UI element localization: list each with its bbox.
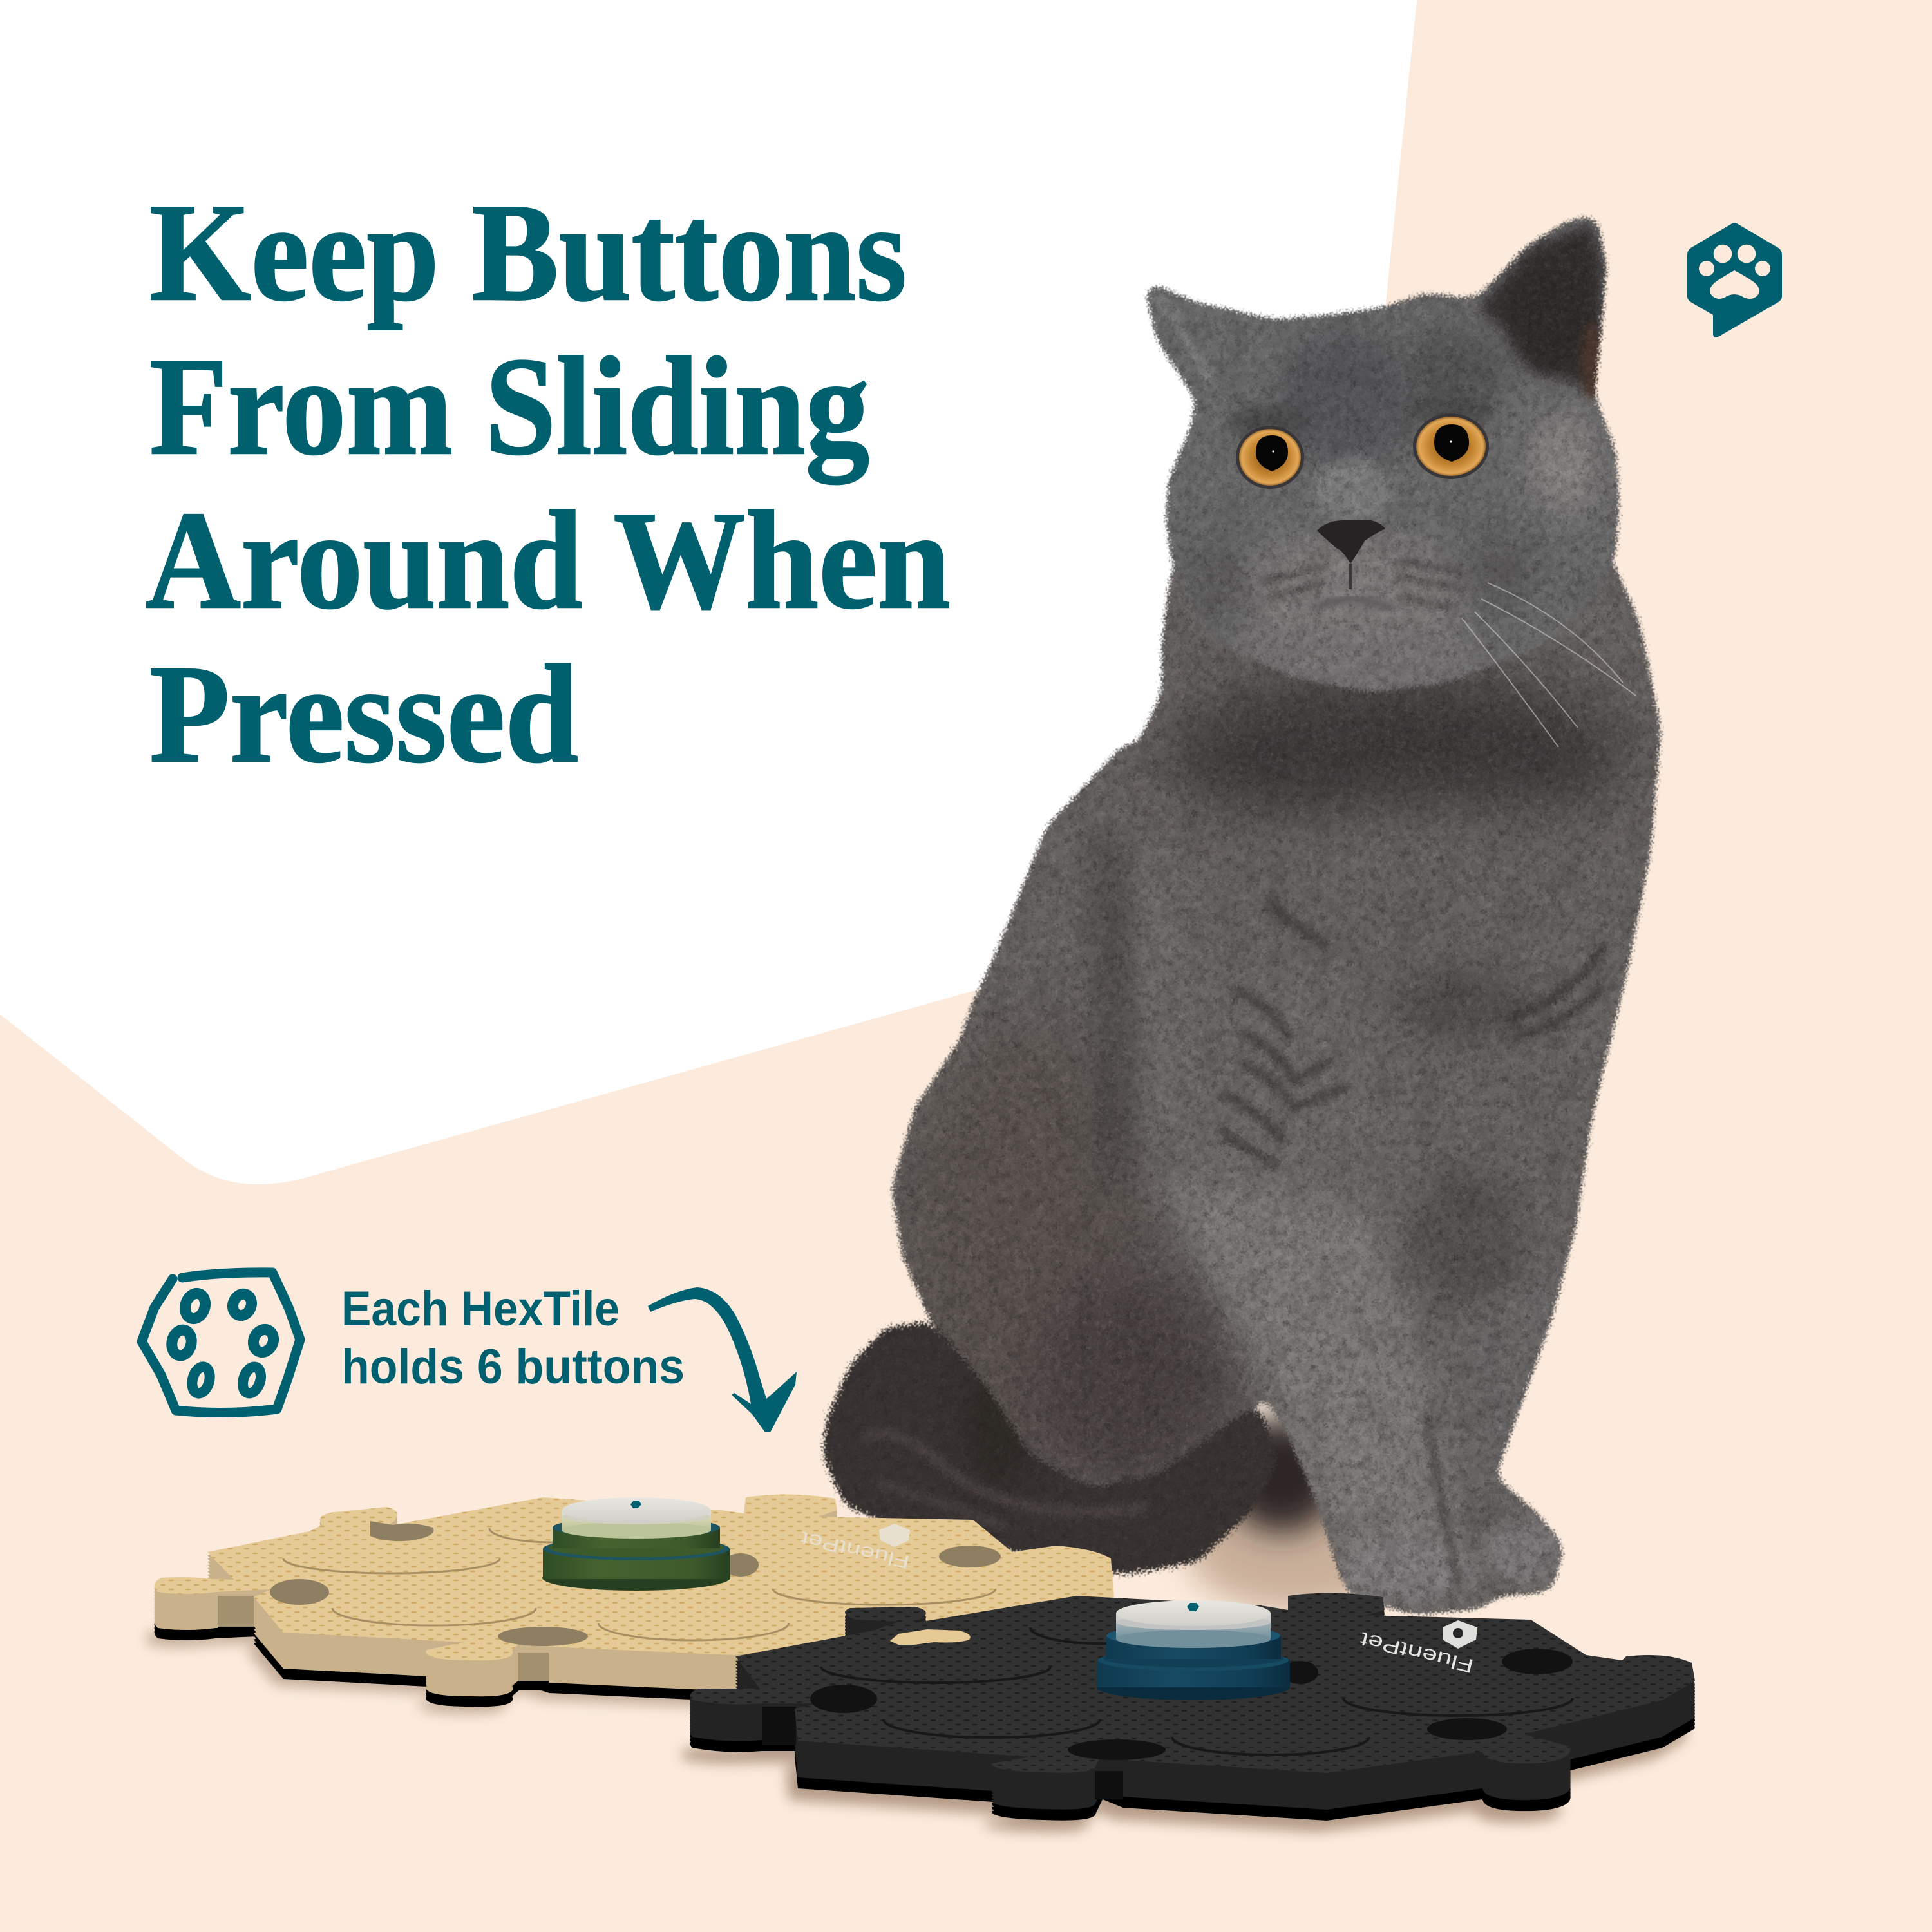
black tile top face [690, 1593, 1695, 1773]
cat eyes [1236, 413, 1489, 489]
tan tile logo: FluentPet [799, 1528, 911, 1573]
title: Around When [146, 483, 951, 638]
tan tile top face [155, 1494, 1114, 1660]
right ear interior [1478, 222, 1605, 393]
icon: hexagon tile with six button slots [142, 1273, 300, 1413]
black tile holes [810, 1649, 1573, 1760]
tan tile holes [270, 1521, 1001, 1646]
cat tail [818, 1314, 1288, 1584]
cat shadow on floor [1185, 1417, 1404, 1610]
black tile logo: FluentPet [1358, 1628, 1476, 1677]
tile: black hextile with button [690, 1593, 1695, 1821]
black tile gaps beside nubs [762, 1707, 1123, 1799]
tile: tan hextile with button [147, 1494, 1686, 1832]
title: Pressed [149, 637, 578, 792]
tan tile button [542, 1497, 730, 1591]
text: each hextile holds 6 buttons: holds 6 buttons [341, 1340, 685, 1394]
tan tile gaps beside nubs [218, 1596, 549, 1690]
arrow: hand-drawn pointing to tiles [648, 1287, 797, 1432]
dark tile shadow [681, 1652, 1686, 1832]
tan bone insert [890, 1629, 971, 1645]
icon: paw speech bubble logo [1687, 223, 1782, 337]
cat head [1140, 209, 1629, 705]
title [146, 175, 951, 792]
black tile button [1097, 1600, 1290, 1700]
black tile sides [690, 1597, 1695, 1810]
title: Keep Buttons [149, 175, 907, 330]
text: each hextile holds 6 buttons [341, 1282, 685, 1394]
cat [818, 209, 1674, 1623]
tan tile base [155, 1533, 1114, 1707]
cat whiskers [1462, 583, 1636, 747]
cat body and legs [869, 547, 1674, 1623]
title: From Sliding [149, 329, 869, 484]
white angular panel [0, 0, 1417, 1184]
tan tile sides [155, 1497, 1114, 1696]
tan tile recesses [283, 1528, 996, 1640]
black tile base [690, 1633, 1695, 1821]
text: each hextile holds 6 buttons: Each HexTile [341, 1282, 620, 1336]
black tile recesses [821, 1627, 1573, 1755]
tan tile shadow [147, 1547, 1106, 1713]
cat nose and mouth [1317, 520, 1391, 609]
